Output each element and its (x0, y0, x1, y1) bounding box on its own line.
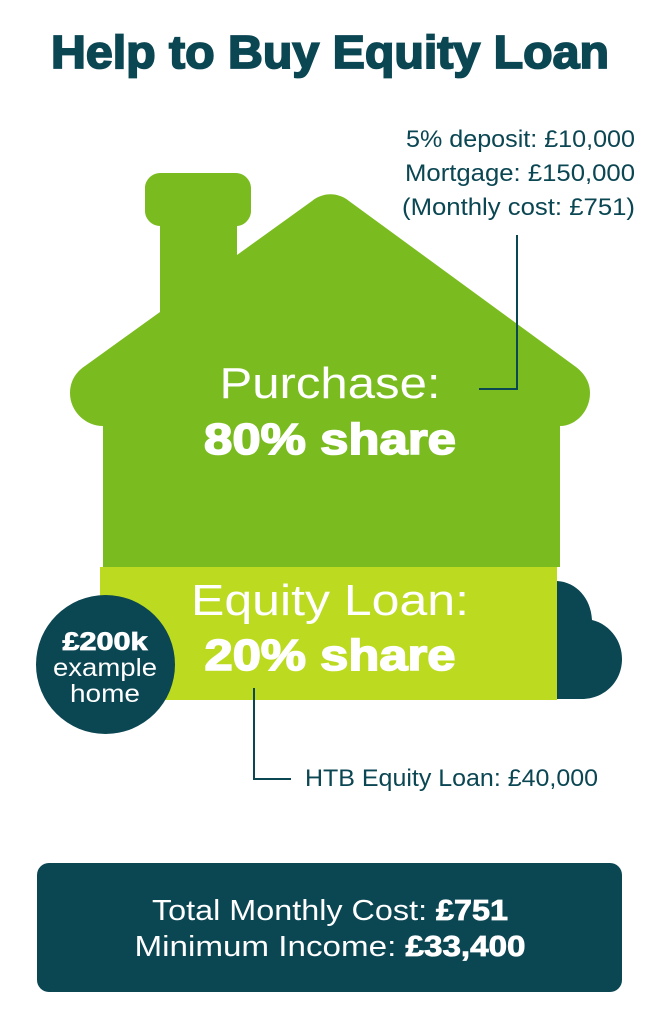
badge: example home: £200k (62, 628, 148, 656)
callout: HTB equity loan: HTB Equity Loan: £40,000 (305, 765, 598, 792)
equity loan section (100, 567, 557, 700)
badge: example home: example (53, 654, 157, 682)
purchase label: Purchase: (220, 359, 440, 408)
equity loan label: Equity Loan: (191, 576, 469, 625)
icon: bush behind house (540, 581, 622, 699)
callout: deposit and mortgage: Mortgage: £150,000 (405, 160, 635, 187)
callout: HTB equity loan (254, 688, 598, 792)
panel: totals (37, 863, 622, 992)
title: Help to Buy Equity Loan (51, 26, 609, 78)
minimum income: Minimum Income: £33,400 (134, 931, 526, 963)
callout: deposit and mortgage (402, 126, 635, 389)
purchase share: 80% share (204, 415, 456, 464)
callout: deposit and mortgage: 5% deposit: £10,000 (406, 126, 635, 153)
equity loan share: 20% share (204, 631, 456, 680)
total monthly cost: Total Monthly Cost: £751 (152, 895, 508, 927)
badge: example home (36, 595, 175, 734)
badge: example home: home (70, 680, 140, 708)
callout: deposit and mortgage: (Monthly cost: £751) (402, 194, 635, 221)
house: purchase section (70, 173, 590, 567)
